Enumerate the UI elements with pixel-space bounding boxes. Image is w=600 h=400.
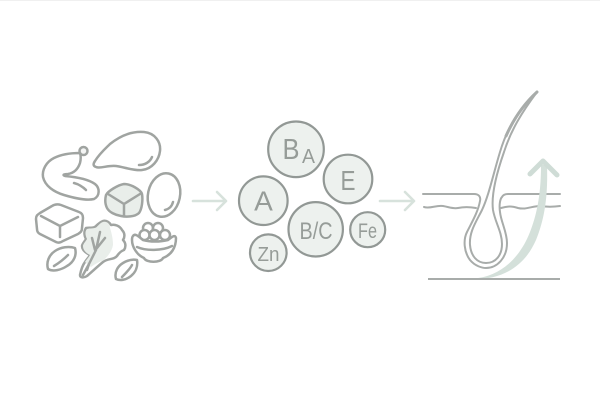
icon: almond right xyxy=(115,260,137,280)
icon: egg xyxy=(144,170,184,220)
nutrient circle: B A: B xyxy=(282,134,300,166)
arrow: foods to nutrients xyxy=(193,192,226,210)
arrow: nutrients to hair xyxy=(380,192,414,210)
nutrient circle: B A xyxy=(268,122,324,177)
panel: foods xyxy=(36,132,184,280)
icon: drumstick xyxy=(43,147,99,200)
icon: almond left xyxy=(47,247,76,270)
icon: tofu block xyxy=(36,204,83,243)
nutrient circle: B/C xyxy=(288,202,343,256)
nutrient circle: Fe xyxy=(350,212,385,247)
nutrient circle: Zn xyxy=(250,234,287,271)
panel: nutrients xyxy=(239,122,385,271)
nutrient circle: E xyxy=(324,155,372,203)
panel: hair follicle xyxy=(423,92,560,280)
nutrient circle: A: A xyxy=(254,186,273,216)
skin layers and follicle outline xyxy=(423,194,560,268)
nutrient circle: B/C: B/C xyxy=(300,218,332,245)
nutrient circle: E: E xyxy=(340,165,356,196)
nutrient circle: A xyxy=(239,176,288,225)
nutrient circle: Fe: Fe xyxy=(358,220,377,243)
arrow: growth upward xyxy=(473,161,557,280)
nutrient circle: B A: A xyxy=(302,145,315,168)
base line xyxy=(428,278,560,280)
nutrient circle: Zn: Zn xyxy=(258,244,280,266)
icon: hair strand xyxy=(470,92,537,263)
icon: chicken thigh xyxy=(94,132,160,170)
icon: spinach leaf xyxy=(80,221,125,277)
icon: bowl of beans xyxy=(132,223,176,262)
icon: cheese cube xyxy=(105,184,142,217)
